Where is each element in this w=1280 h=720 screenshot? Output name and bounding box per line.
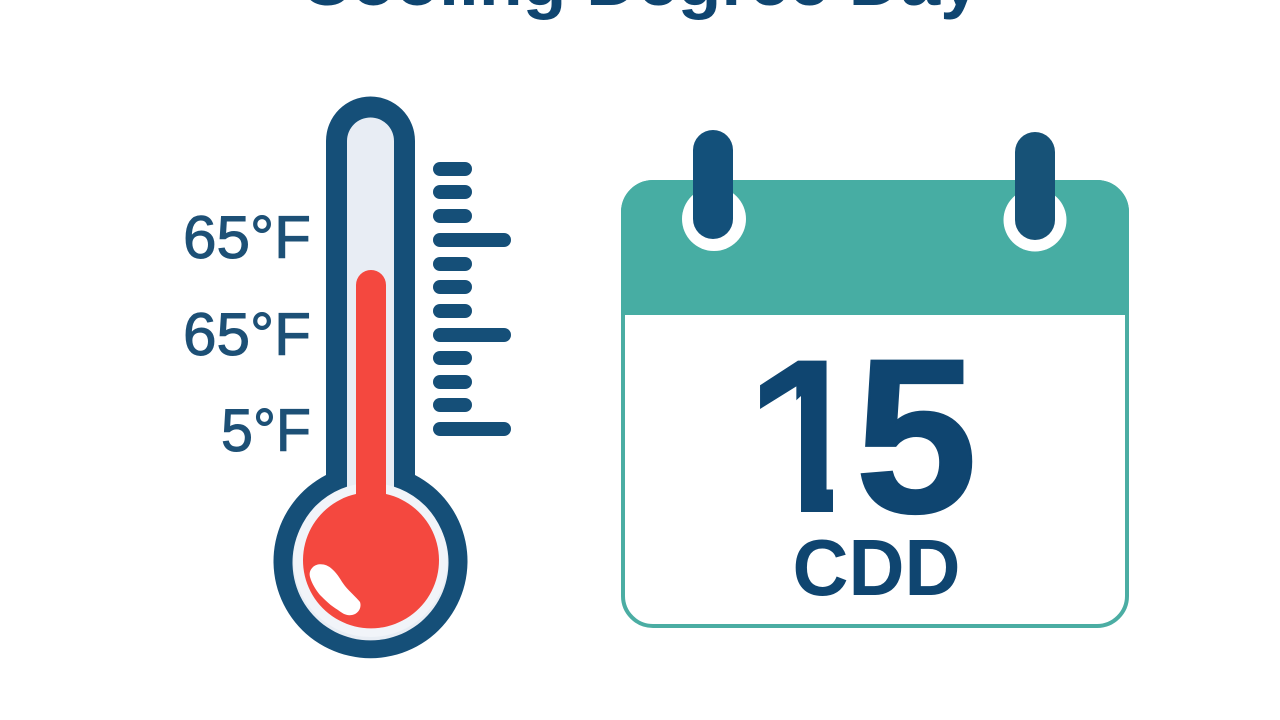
temperature labels (183, 204, 311, 464)
number 15: 1 (745, 313, 867, 559)
thermometer glass (293, 118, 449, 640)
binding ring left (693, 130, 733, 239)
label: middle 65°F: 65°F (183, 301, 311, 368)
number 15: 5 (855, 313, 977, 559)
bulb highlight (310, 564, 361, 615)
calendar page (623, 182, 1127, 626)
thermometer outer casing (274, 96, 467, 658)
CDD label: CDD (792, 523, 960, 612)
calendar (621, 130, 1129, 626)
binding hole left (682, 187, 746, 251)
number 15 (760, 360, 972, 516)
mercury column and bulb (303, 270, 439, 628)
thermometer scale ticks (433, 162, 511, 436)
label: 5°F: 5°F (221, 397, 311, 464)
thermometer (274, 96, 467, 658)
bulb inner ring (294, 483, 448, 637)
calendar header (621, 180, 1129, 315)
binding hole right (1004, 188, 1066, 252)
binding ring right (1015, 132, 1055, 240)
label: upper 65°F: 65°F (183, 204, 311, 271)
